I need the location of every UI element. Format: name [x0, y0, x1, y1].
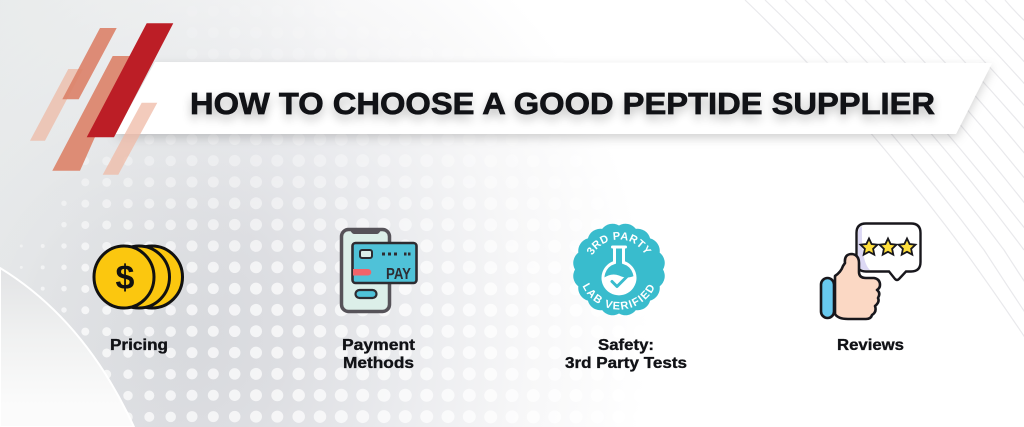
icon: lab verified badge: 3RD PARTY	[587, 232, 652, 254]
title shadow: HOW TO CHOOSE A GOOD PEPTIDE SUPPLIER	[190, 91, 935, 126]
icon: thumbs up review	[821, 224, 920, 319]
icon: lab verified badge	[573, 224, 665, 316]
icon: lab verified badge: LAB VERIFIED	[582, 282, 654, 310]
icon: coins: $	[116, 259, 135, 297]
diagonal lines	[745, 0, 1024, 345]
red diagonal bars	[30, 23, 173, 175]
dot pattern	[20, 155, 497, 423]
label: safety: 3rd Party Tests	[565, 355, 687, 372]
label: payment methods	[342, 337, 415, 372]
label: safety: Safety:	[598, 337, 654, 354]
icon: payment phone and card	[342, 229, 416, 312]
curved corner shape	[0, 268, 134, 427]
label: reviews: Reviews	[837, 337, 904, 354]
icon: payment phone and card: PAY	[386, 266, 411, 283]
title banner	[115, 62, 992, 134]
label: payment methods: Methods	[343, 355, 414, 372]
label: payment methods: Payment	[342, 337, 415, 354]
title: HOW TO CHOOSE A GOOD PEPTIDE SUPPLIER	[190, 86, 935, 121]
label: pricing: Pricing	[110, 337, 168, 354]
label: safety	[565, 337, 687, 372]
icon: coins	[94, 246, 182, 308]
